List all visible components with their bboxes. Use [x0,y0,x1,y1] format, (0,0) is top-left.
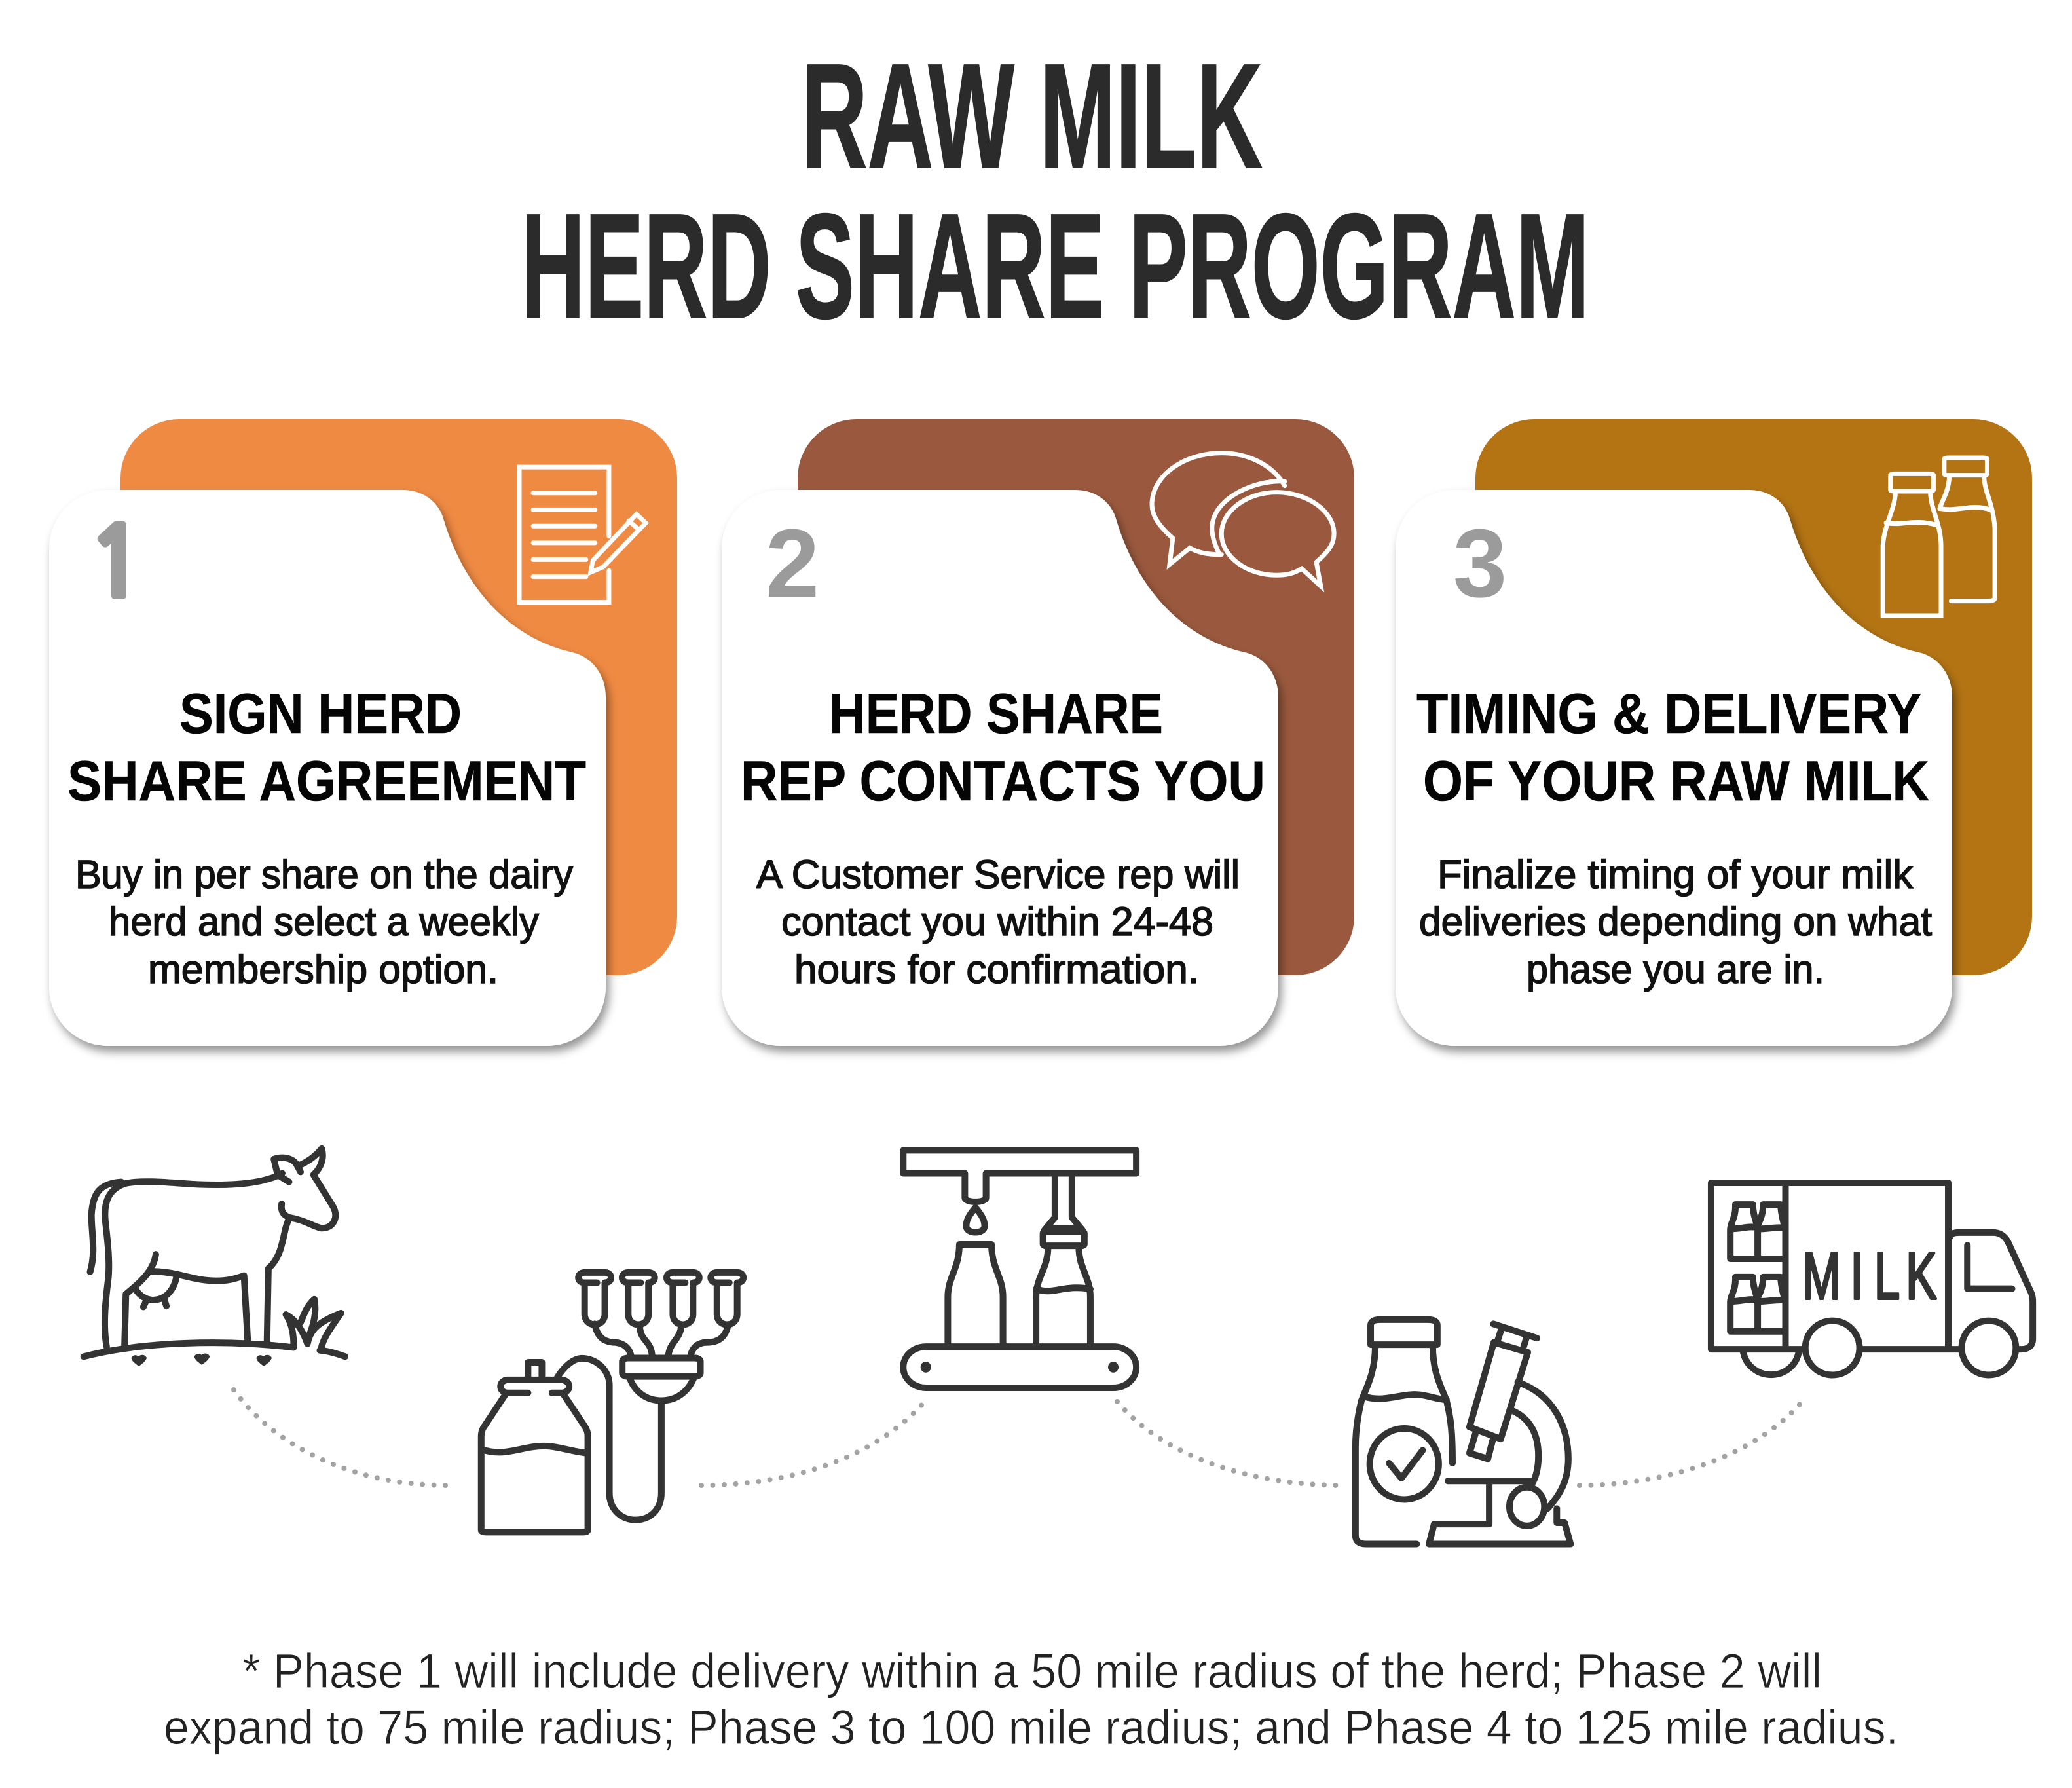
step number 1: 1 [87,516,146,612]
footnote: * Phase 1 will include delivery within a 50 mile radius of the herd; Phase 2 will [242,1644,1822,1698]
footnote [164,1644,1898,1755]
description: Buy in per share on the dairy [75,852,573,897]
description: phase you are in. [1526,947,1824,992]
panel: step 1 sign agreement [49,419,677,1046]
icon: bottling conveyor [903,1150,1136,1388]
white card [722,490,1278,1046]
arrow: dotted path cow to milker [234,1390,447,1485]
icon: milk bottles [1883,458,1995,616]
icon: speech bubbles [1152,453,1334,586]
heading: SIGN HERD [179,682,462,745]
title: RAW MILK [802,33,1263,200]
heading [67,682,586,813]
icon: milk delivery truck [1711,1183,2033,1375]
description: hours for confirmation. [794,947,1199,992]
heading: SHARE AGREEMENT [67,750,586,813]
heading: OF YOUR RAW MILK [1423,750,1929,813]
arrow: dotted path milker to bottling [701,1402,925,1485]
description: Finalize timing of your milk [1437,852,1914,897]
orange backing card [120,419,677,975]
description: A Customer Service rep will [756,852,1240,897]
description [1419,852,1932,992]
heading: TIMING & DELIVERY [1416,682,1921,745]
step number 2: 2 [766,510,819,618]
icon: cow in pasture [84,1149,345,1365]
arrow: dotted path bottling to testing [1117,1402,1344,1485]
description [756,852,1240,992]
description: membership option. [148,947,498,992]
description: contact you within 24-48 [781,899,1213,944]
footnote: expand to 75 mile radius; Phase 3 to 100 mile radius; and Phase 4 to 125 mile radius. [164,1700,1898,1755]
description [75,852,573,992]
icon: bottle and microscope [1356,1320,1570,1544]
panel: step 2 rep contacts [722,419,1354,1046]
description: deliveries depending on what [1419,899,1932,944]
icon: milking machine [481,1273,743,1532]
brown backing card [798,419,1354,975]
heading [1416,682,1929,813]
step number 3: 3 [1453,510,1507,618]
description: herd and select a weekly [109,899,539,944]
icon: document and pencil [519,467,646,603]
heading: REP CONTACTS YOU [741,750,1265,813]
arrow: dotted path testing to delivery [1580,1402,1802,1485]
title [521,33,1589,350]
amber backing card [1475,419,2032,975]
white card [49,490,606,1046]
white card [1396,490,1952,1046]
heading [741,682,1265,813]
icon: milk delivery truck: MILK [1802,1240,1936,1313]
panel: step 3 timing and delivery [1396,419,2032,1046]
heading: HERD SHARE [829,682,1163,745]
